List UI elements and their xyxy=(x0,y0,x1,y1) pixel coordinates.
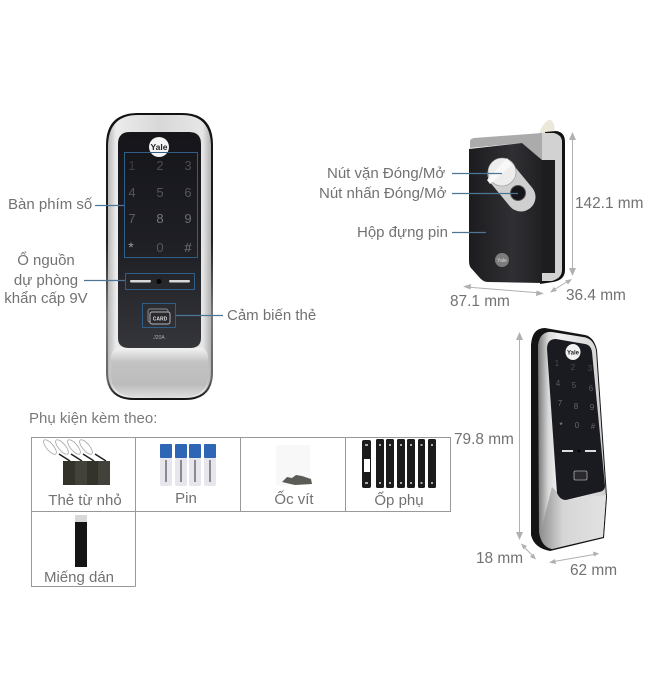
angled view of lock xyxy=(531,328,607,551)
label: thumb turn: Nút vặn Đóng/Mở xyxy=(327,165,445,182)
dimension: 36.4 mm: 36.4 mm xyxy=(566,287,626,304)
keypad digits: 6 xyxy=(589,384,594,393)
front view of lock xyxy=(106,113,213,400)
keypad highlight and digits: 0 xyxy=(156,240,164,255)
keypad highlight and digits: 9 xyxy=(184,211,192,226)
accessory: batteries: Pin xyxy=(175,490,197,507)
silver top shell xyxy=(470,133,542,160)
label: backup power: Ổ nguồn xyxy=(17,251,75,269)
backup power slot highlight xyxy=(126,274,194,290)
side silver shell xyxy=(540,133,562,281)
label: card sensor: Cảm biến thẻ xyxy=(227,307,316,324)
Yale logo: Yale xyxy=(567,350,580,356)
label: backup power xyxy=(4,251,125,307)
dimension: 62 mm: 62 mm xyxy=(570,562,617,579)
keypad digits: 4 xyxy=(556,379,561,388)
Yale back badge xyxy=(495,253,509,267)
keypad highlight and digits: 4 xyxy=(128,185,136,200)
model mark: J20A xyxy=(153,335,165,341)
keypad digits: 2 xyxy=(571,363,576,372)
accessory: key tags xyxy=(42,438,122,509)
keypad digits: * xyxy=(559,421,563,430)
keypad highlight and digits: 8 xyxy=(156,211,164,226)
accessory: screws xyxy=(274,445,314,508)
thumb turn knob xyxy=(488,158,516,186)
accessory: screws: Ốc vít xyxy=(274,490,314,508)
keypad highlight and digits: 7 xyxy=(128,211,136,226)
keypad highlight and digits xyxy=(124,152,198,258)
back view of lock xyxy=(469,120,565,284)
keypad highlight and digits: 2 xyxy=(156,158,164,173)
Yale back badge: Yale xyxy=(497,258,507,264)
black panel xyxy=(547,339,605,500)
keypad highlight and digits: # xyxy=(184,240,192,255)
keypad highlight and digits: * xyxy=(128,239,134,255)
accessory: adhesive strip xyxy=(44,515,114,586)
table grid xyxy=(32,438,450,586)
dimension: 87.1 mm xyxy=(450,284,544,310)
push button xyxy=(510,186,526,200)
Yale logo: Yale xyxy=(150,142,168,152)
lock body xyxy=(106,113,213,400)
accessory: cover plates xyxy=(362,439,436,509)
side black insert xyxy=(541,160,555,273)
accessories heading: Phụ kiện kèm theo: xyxy=(29,410,157,427)
label: push button: Nút nhấn Đóng/Mở xyxy=(319,185,447,202)
black touch panel xyxy=(118,132,201,348)
keypad highlight and digits: 3 xyxy=(184,158,192,173)
dimension: 18 mm xyxy=(476,544,536,567)
keypad digits: 1 xyxy=(555,359,560,368)
accessory: key tags: Thẻ từ nhỏ xyxy=(48,492,122,509)
keypad digits: 0 xyxy=(575,421,580,430)
label: backup power: khẩn cấp 9V xyxy=(4,290,88,307)
dimension: 79.8 mm: 79.8 mm xyxy=(454,431,514,448)
label: keypad: Bàn phím số xyxy=(8,196,93,213)
label: backup power: dự phòng xyxy=(14,272,78,289)
accessory: cover plates: Ốp phụ xyxy=(374,491,424,509)
slot bars xyxy=(562,450,596,452)
keypad digits xyxy=(555,359,596,431)
card sensor highlight xyxy=(142,304,176,328)
dimension: 18 mm: 18 mm xyxy=(476,550,523,567)
dimension: 142.1 mm: 142.1 mm xyxy=(575,195,643,212)
dimension: 79.8 mm xyxy=(454,332,523,540)
keypad digits: 5 xyxy=(572,381,577,390)
dimension: 62 mm xyxy=(549,552,617,579)
latch tab xyxy=(539,120,555,134)
outer black edge xyxy=(540,131,565,284)
accessory: batteries xyxy=(160,444,216,507)
accessories table xyxy=(32,438,450,586)
keypad digits: 3 xyxy=(588,364,593,373)
black back cover xyxy=(469,143,542,283)
keypad digits: # xyxy=(591,422,596,431)
keypad highlight and digits: 6 xyxy=(184,185,192,200)
body shell xyxy=(531,328,607,551)
dimension: 87.1 mm: 87.1 mm xyxy=(450,293,510,310)
accessory: adhesive strip: Miếng dán xyxy=(44,569,114,586)
Yale logo xyxy=(566,344,580,360)
keypad digits: 8 xyxy=(574,402,579,411)
keypad highlight and digits: 1 xyxy=(128,158,136,173)
Yale logo xyxy=(149,137,169,157)
keypad highlight and digits: 5 xyxy=(156,185,164,200)
silver knob plate xyxy=(502,174,521,197)
card icon xyxy=(574,471,587,480)
dimension: 36.4 mm xyxy=(550,279,626,304)
dimension: 142.1 mm xyxy=(569,132,643,276)
lower silver face xyxy=(540,487,606,549)
card sensor highlight: CARD xyxy=(153,316,168,322)
keypad digits: 7 xyxy=(558,399,563,408)
keypad digits: 9 xyxy=(590,403,595,412)
label: battery box: Hộp đựng pin xyxy=(357,224,448,241)
